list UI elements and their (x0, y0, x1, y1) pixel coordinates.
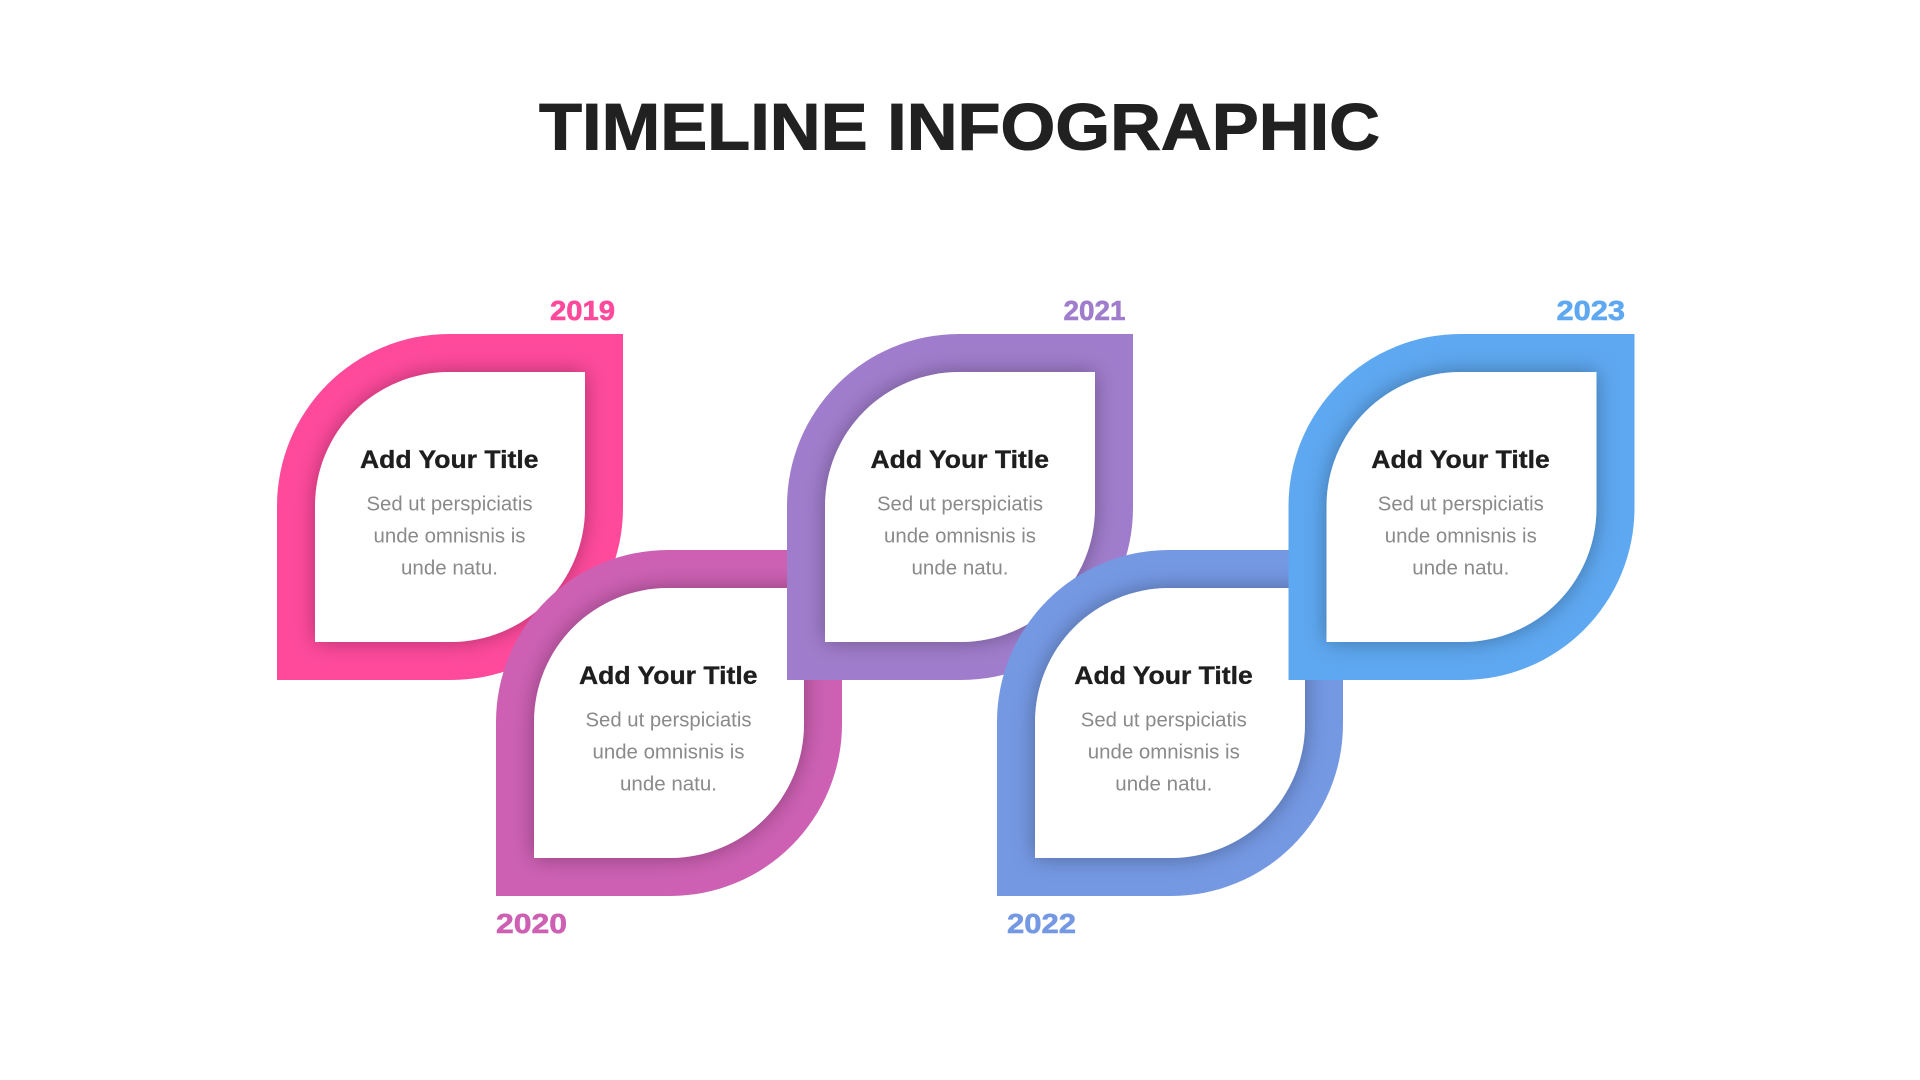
card text: 2019 (366, 494, 532, 580)
card text: 2020: Sed ut perspiciatis (586, 710, 752, 732)
card text: 2022: unde omnisnis is (1088, 742, 1240, 764)
card title: 2020: Add Your Title (579, 662, 758, 690)
year: 2021: 2021 (1064, 295, 1126, 326)
year: 2023: 2023 (1556, 295, 1625, 326)
leaf shape: 2019 (277, 334, 623, 680)
panel: 2020 (496, 550, 842, 939)
card text: 2019: unde omnisnis is (374, 526, 526, 548)
panel: 2019 (277, 295, 623, 680)
card text: 2023 (1378, 494, 1544, 580)
card text: 2022: Sed ut perspiciatis (1081, 710, 1247, 732)
panel: 2022 (997, 550, 1343, 939)
card text: 2020 (586, 710, 752, 796)
panel: 2023 (1288, 295, 1634, 680)
card title: 2019: Add Your Title (360, 446, 539, 474)
card text: 2023: Sed ut perspiciatis (1378, 494, 1544, 516)
card title: 2022: Add Your Title (1074, 662, 1253, 690)
year: 2022: 2022 (1007, 908, 1076, 939)
card text: 2023: unde omnisnis is (1385, 526, 1537, 548)
card text: 2021: unde omnisnis is (884, 526, 1036, 548)
card text: 2021: Sed ut perspiciatis (877, 494, 1043, 516)
card text: 2021: unde natu. (912, 558, 1008, 580)
card title: 2023: Add Your Title (1371, 446, 1550, 474)
card text: 2022 (1081, 710, 1247, 796)
leaf shape: 2020 (496, 550, 842, 896)
card text: 2022: unde natu. (1115, 774, 1212, 796)
card text: 2019: unde natu. (401, 558, 498, 580)
card text: 2023: unde natu. (1412, 558, 1509, 580)
card text: 2020: unde omnisnis is (592, 742, 744, 764)
year: 2019: 2019 (550, 295, 615, 326)
leaf shape: 2021 (787, 334, 1133, 680)
panel: 2021 (787, 295, 1133, 680)
year: 2020: 2020 (496, 908, 567, 939)
card text: 2020: unde natu. (620, 774, 717, 796)
title: TIMELINE INFOGRAPHIC (539, 90, 1380, 164)
card text: 2019: Sed ut perspiciatis (366, 494, 532, 516)
card text: 2021 (877, 494, 1043, 580)
leaf shape: 2023 (1288, 334, 1634, 680)
leaf shape: 2022 (997, 550, 1343, 896)
card title: 2021: Add Your Title (870, 446, 1049, 474)
